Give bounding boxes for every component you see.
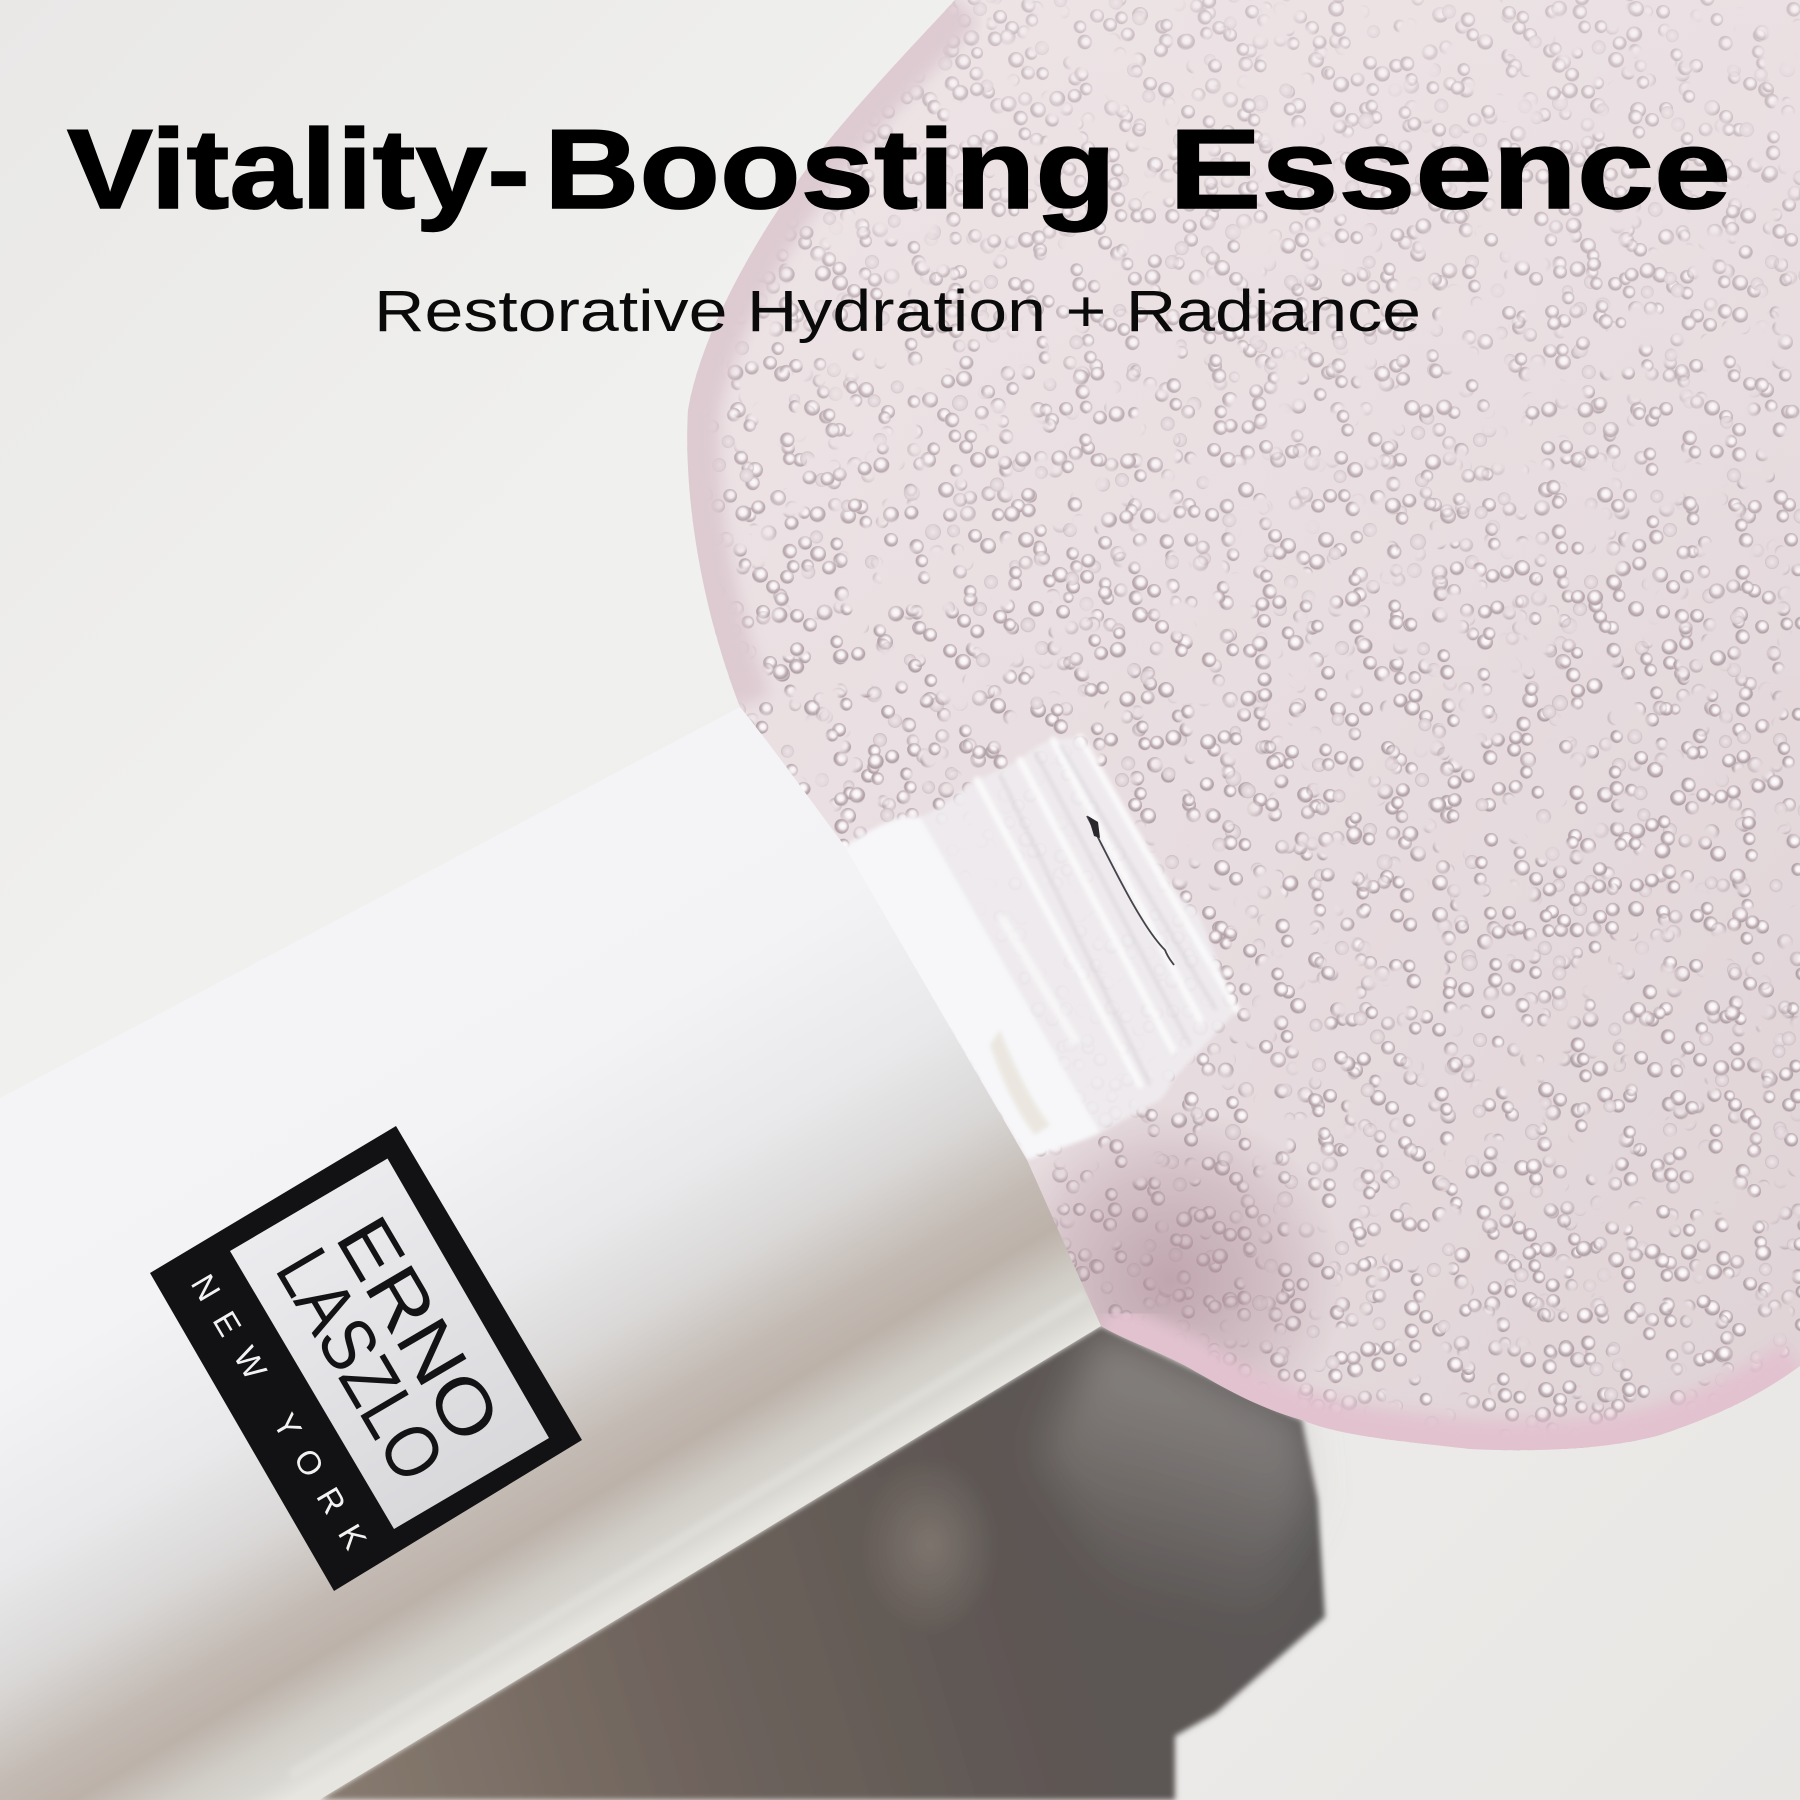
wordmark NEW YORK: NEW YORK <box>184 1268 374 1555</box>
title: Boosting <box>544 106 1116 232</box>
cast shadow of bottle <box>319 1326 1325 1800</box>
gel blob with bubbles <box>680 0 1800 1480</box>
bottle neck: collar and glass threads <box>840 737 1237 1160</box>
bottle body <box>0 707 1101 1800</box>
title: Vitality- <box>67 106 530 232</box>
wordmark ERNO: ERNO <box>319 1202 517 1457</box>
title <box>67 106 1731 232</box>
bottle lower lip highlight <box>290 1295 1085 1775</box>
glass dark reflection <box>1087 816 1174 965</box>
label black frame <box>150 1126 582 1591</box>
label inner panel <box>230 1158 549 1529</box>
brand label <box>150 1126 582 1591</box>
title: Essence <box>1169 106 1731 232</box>
wordmark LASZLO: LASZLO <box>259 1234 461 1496</box>
subtitle: Restorative Hydration + Radiance <box>374 279 1421 344</box>
